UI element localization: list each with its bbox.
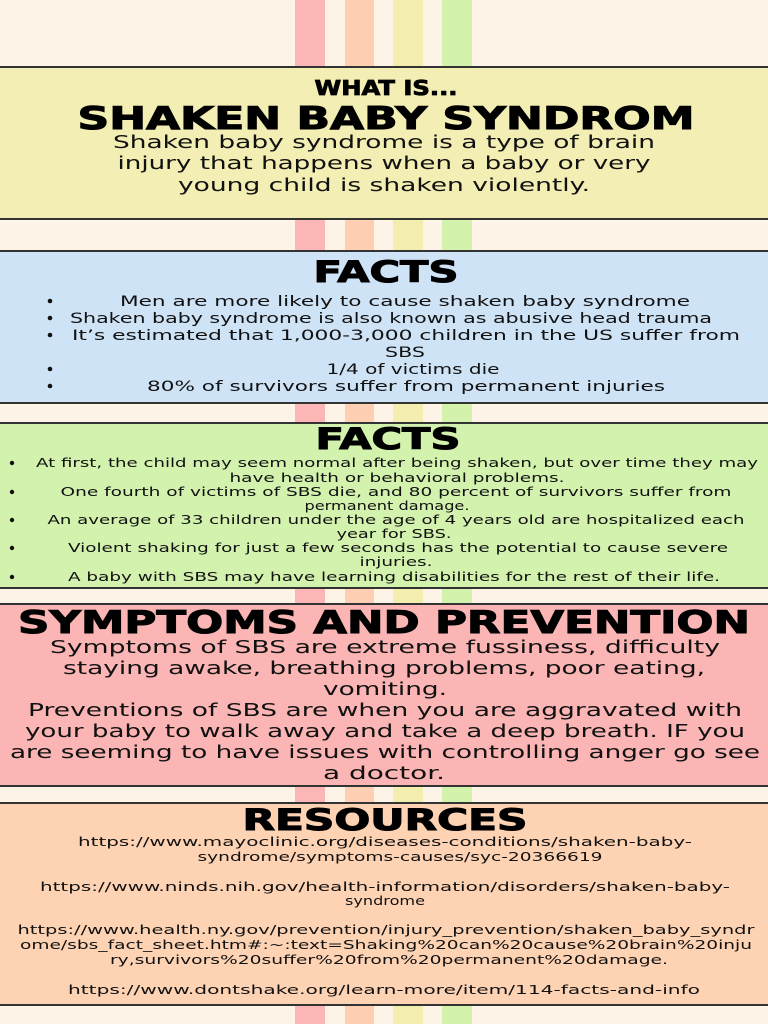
text block: links: ome/sbs_fact_sheet.htm#:~:text=Shaking%20can%20cause%20brain%20inju bbox=[20, 937, 752, 952]
text block: symptoms and prevention: are seeming to have issues with controlling anger go see bbox=[10, 743, 760, 763]
heading: symptoms and prevention: SYMPTOMS AND PREVENTION bbox=[18, 605, 750, 641]
text block: links: https://www.mayoclinic.org/diseases-conditions/shaken-baby- bbox=[78, 834, 692, 849]
list: facts: Shaken baby syndrome is also known as abusive head trauma bbox=[70, 311, 712, 327]
title: SHAKEN BABY SYNDROM bbox=[78, 101, 694, 137]
text block: symptoms and prevention: a doctor. bbox=[323, 764, 445, 784]
list: facts bbox=[48, 294, 740, 395]
panel: facts green bbox=[0, 422, 768, 588]
list: facts: Men are more likely to cause shaken baby syndrome bbox=[120, 294, 690, 310]
list: facts detailed: injuries. bbox=[360, 554, 432, 569]
heading: what is: WHAT IS... bbox=[314, 76, 458, 100]
text block: links: https://www.health.ny.gov/prevention/injury_prevention/shaken_baby_syndr bbox=[18, 922, 756, 937]
list: facts detailed: At first, the child may seem normal after being shaken, but over time they may bbox=[36, 455, 759, 470]
list: facts detailed: An average of 33 children under the age of 4 years old are hospitalized each bbox=[48, 512, 744, 527]
text block: links: https://www.dontshake.org/learn-more/item/114-facts-and-info bbox=[68, 982, 700, 997]
text block: links: ry,survivors%20suffer%20from%20permanent%20damage. bbox=[110, 952, 668, 967]
list: facts: SBS bbox=[385, 345, 425, 361]
list: facts detailed bbox=[10, 455, 759, 584]
text block: definition: Shaken baby syndrome is a type of brain bbox=[113, 133, 655, 153]
text block: definition bbox=[113, 133, 655, 196]
heading: facts: FACTS bbox=[314, 255, 458, 289]
panel: what is bbox=[0, 67, 768, 219]
text block: symptoms and prevention bbox=[10, 638, 760, 784]
text block: links bbox=[18, 834, 756, 997]
text block: symptoms and prevention: Symptoms of SBS are extreme fussiness, difficulty bbox=[50, 638, 720, 658]
text block: definition: young child is shaken violently. bbox=[178, 176, 590, 196]
text block: definition: injury that happens when a baby or very bbox=[118, 154, 650, 174]
list: facts: 80% of survivors suffer from permanent injuries bbox=[147, 379, 665, 395]
text block: links: syndrome bbox=[345, 893, 425, 908]
list: facts detailed: A baby with SBS may have learning disabilities for the rest of their life. bbox=[68, 569, 720, 584]
text block: links: https://www.ninds.nih.gov/health-information/disorders/shaken-baby- bbox=[40, 879, 730, 894]
list: facts detailed: permanent damage. bbox=[304, 498, 470, 513]
text block: links: syndrome/symptoms-causes/syc-20366619 bbox=[198, 849, 603, 864]
heading: resources: RESOURCES bbox=[242, 803, 528, 837]
list: facts: It’s estimated that 1,000-3,000 children in the US suffer from bbox=[72, 328, 740, 344]
text block: symptoms and prevention: Preventions of SBS are when you are aggravated with bbox=[28, 701, 742, 721]
list: facts detailed: have health or behavioral problems. bbox=[230, 470, 564, 485]
list: facts: 1/4 of victims die bbox=[326, 362, 500, 378]
list: facts detailed: Violent shaking for just a few seconds has the potential to cause severe bbox=[68, 540, 728, 555]
list: facts detailed: One fourth of victims of SBS die, and 80 percent of survivors suffer from bbox=[60, 484, 732, 499]
panel: resources bbox=[0, 803, 768, 1005]
text block: symptoms and prevention: staying awake, breathing problems, poor eating, bbox=[63, 659, 705, 679]
list: facts detailed: year for SBS. bbox=[336, 526, 452, 541]
panel: symptoms and prevention bbox=[0, 604, 768, 786]
panel: facts blue bbox=[0, 251, 768, 403]
heading: facts: FACTS bbox=[316, 422, 460, 456]
text block: symptoms and prevention: your baby to walk away and take a deep breath. IF you bbox=[25, 722, 745, 742]
text block: symptoms and prevention: vomiting. bbox=[323, 680, 447, 700]
